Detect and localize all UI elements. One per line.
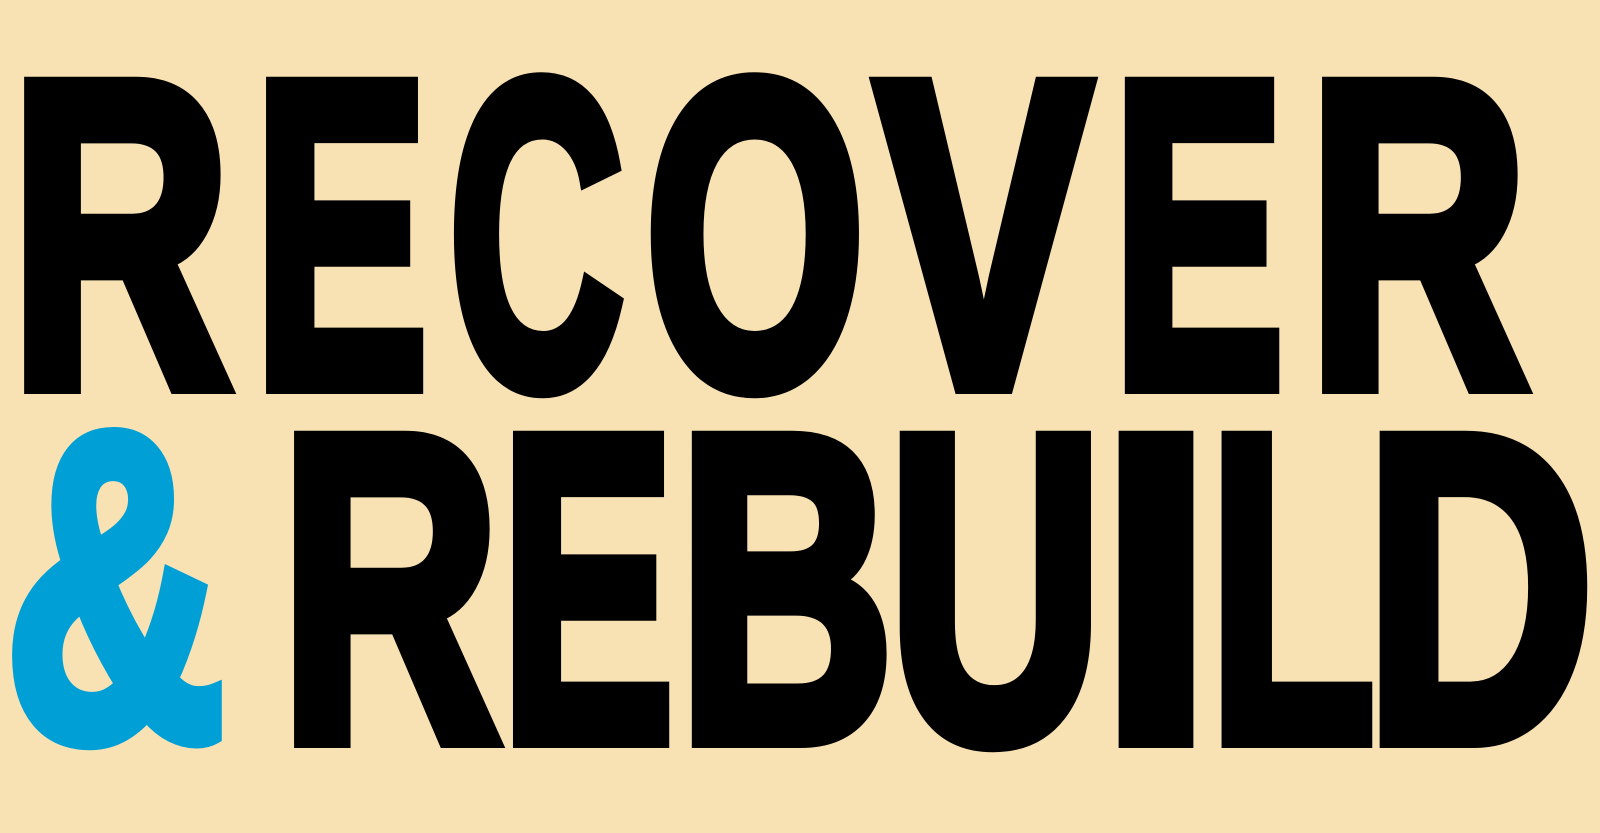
title line 2: REBUILD: I <box>1100 346 1212 832</box>
ampersand (blue): & <box>5 344 225 830</box>
title line 2: REBUILD: E <box>501 346 674 832</box>
title line 2: REBUILD: R <box>280 346 500 832</box>
title line 2: REBUILD <box>280 346 1594 832</box>
title line 1: RECOVER: E <box>254 0 428 478</box>
title line 1: RECOVER: R <box>10 0 231 478</box>
title line 1: RECOVER: E <box>1113 0 1284 478</box>
title line 1: RECOVER: V <box>876 0 1093 478</box>
title line 1: RECOVER: C <box>449 0 624 478</box>
title line 1: RECOVER <box>10 0 1528 478</box>
title line 2: REBUILD: L <box>1209 346 1375 832</box>
title line 2: REBUILD: U <box>888 346 1103 832</box>
title line 2: REBUILD: B <box>678 346 894 832</box>
title line 1: RECOVER: O <box>645 0 865 478</box>
